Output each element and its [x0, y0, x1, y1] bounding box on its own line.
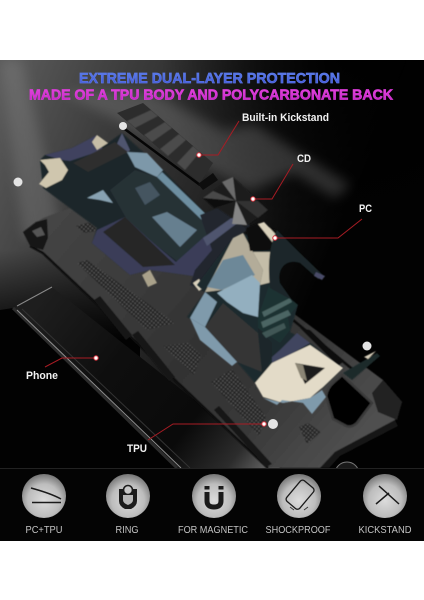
callout: Built-in Kickstand: Built-in Kickstand	[242, 112, 329, 124]
label: RING: RING	[116, 525, 139, 536]
camera lens	[336, 462, 358, 468]
icon: shockproof	[277, 474, 321, 518]
decorative screw balls	[14, 122, 372, 429]
callout: CD: CD	[297, 153, 311, 165]
callout: Phone: Phone	[26, 370, 58, 382]
icon: kickstand	[363, 474, 407, 518]
callout: CD	[251, 153, 311, 201]
title: EXTREME DUAL-LAYER PROTECTION	[79, 70, 340, 87]
title: MADE OF A TPU BODY AND POLYCARBONATE BACK	[29, 86, 393, 104]
icon: magnet	[192, 474, 236, 518]
callout: TPU: TPU	[127, 443, 147, 455]
label: PC+TPU: PC+TPU	[26, 525, 62, 536]
label: KICKSTAND: KICKSTAND	[358, 525, 412, 536]
camera window	[326, 375, 372, 427]
connecting frame	[190, 208, 250, 292]
title	[29, 70, 393, 104]
background	[0, 60, 424, 486]
kickstand ribs	[117, 103, 218, 190]
lower camo block	[187, 222, 380, 414]
callout: TPU	[127, 422, 266, 455]
callout: PC	[273, 203, 372, 240]
phone body	[13, 287, 280, 468]
callout: PC: PC	[359, 203, 372, 215]
icon: PC+TPU	[22, 474, 66, 518]
label: SHOCKPROOF: SHOCKPROOF	[266, 525, 330, 536]
textured grip patches	[76, 206, 321, 444]
TPU case	[23, 180, 402, 468]
bottom band	[0, 468, 424, 541]
icon: ring	[106, 474, 150, 518]
callout: Built-in Kickstand	[197, 112, 329, 157]
CD disc plate	[203, 177, 268, 227]
callout: Phone	[26, 356, 98, 382]
label: FOR MAGNETIC: FOR MAGNETIC	[178, 525, 248, 536]
polycarbonate camo shell	[39, 133, 250, 292]
